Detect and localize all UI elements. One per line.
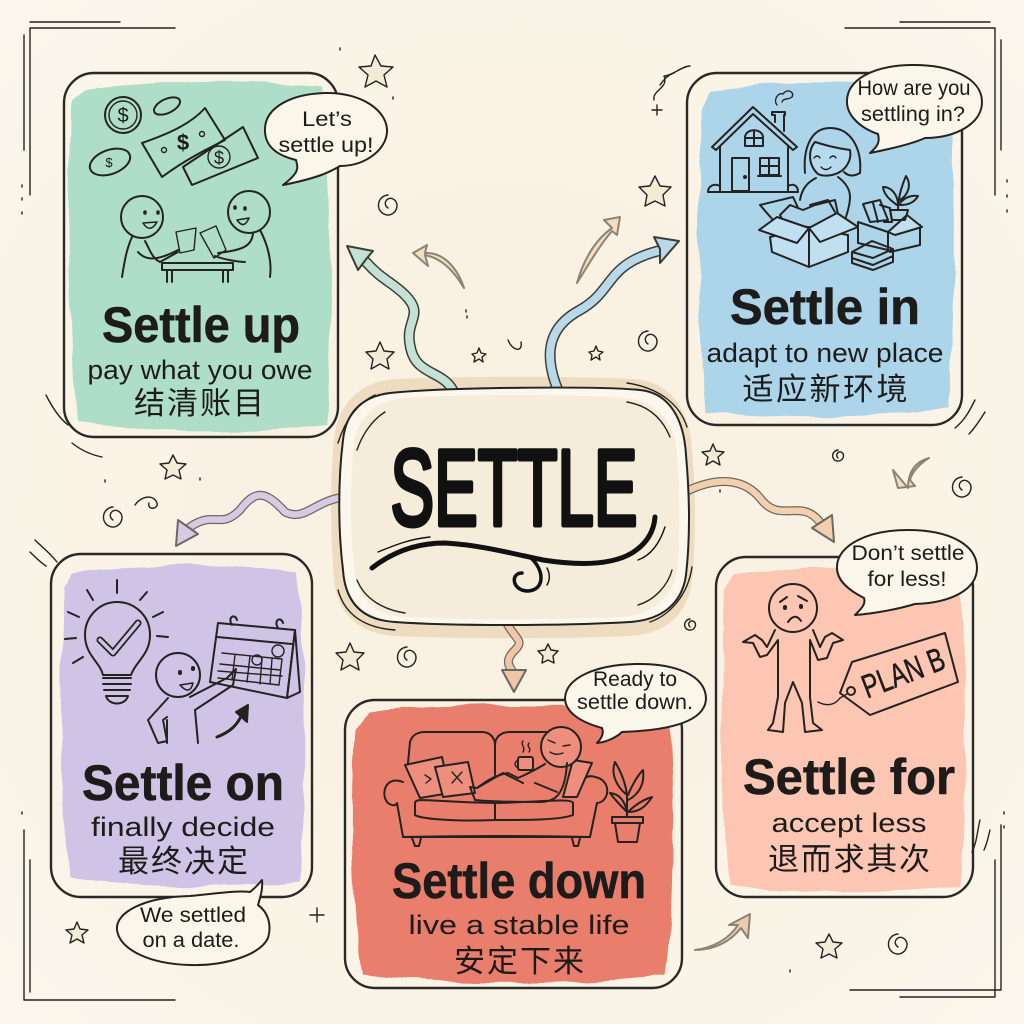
speech bubble: settle up! [278,134,374,157]
panel outline [716,557,973,897]
connector arrows [176,217,929,950]
icon: boxes [759,176,922,270]
title: SETTLE [390,427,638,548]
speech bubble [265,93,387,185]
arrow: to settle up [347,246,455,395]
chinese description: 适应新环境 [742,372,908,407]
description: pay what you owe [88,355,312,385]
description: adapt to new place [706,338,944,368]
panel: settle for [716,530,977,897]
panel outline [687,73,962,425]
panel outline [339,388,689,625]
speech bubble: Ready to [593,668,677,691]
panel outline [345,700,682,988]
icon: money: $ [177,130,189,155]
panel: center settle [338,383,692,630]
speech bubble: settling in? [861,103,965,126]
icon: money [86,94,258,185]
icon: money: $ [105,155,113,170]
arrow: to settle on [176,495,345,546]
arrow: to settle in [550,237,679,395]
icon: price tag [818,633,958,715]
icon: potted plant [610,762,652,842]
icon: house [708,91,798,192]
chinese description: 最终决定 [118,844,248,879]
icon: calendar [210,616,300,737]
panel outline [51,554,312,897]
panel background [61,565,305,887]
speech bubble: settle down. [577,691,693,714]
speech bubble: for less! [868,568,946,591]
icon: money: $ [117,105,129,127]
speech bubble [117,880,270,965]
arrow: to settle for [685,482,834,542]
panel background [352,704,673,983]
icon: sofa with person [384,727,607,846]
icon: person [800,128,860,217]
panel: settle in [687,65,982,425]
description: finally decide [91,812,275,842]
heading: Settle up [102,297,300,353]
arrow: to settle down [502,620,526,692]
panel outline [64,73,338,437]
heading: Settle on [82,755,284,811]
panel background [699,83,954,417]
description: live a stable life [408,910,630,940]
icon: price tag: PLAN B [856,640,950,705]
icon: two people at table [121,191,271,282]
speech bubble: Let’s [302,108,352,131]
panel: settle on [51,554,312,965]
panel background [723,567,966,892]
chinese description: 结清账目 [134,386,264,421]
heading: Settle in [730,279,920,335]
center panel tan band [331,377,695,638]
heading: Settle down [392,853,646,909]
speech bubble [847,65,982,153]
speech bubble [837,530,977,615]
panel: settle up [64,73,387,437]
inner wash [351,395,679,619]
speech bubble: on a date. [142,929,240,952]
underline flourish [372,517,665,591]
chinese description: 退而求其次 [768,842,930,877]
inner panel fill [339,388,689,625]
panel background [69,82,331,431]
icon: shrugging person [743,584,843,732]
speech bubble: Don’t settle [852,542,964,565]
heading: Settle for [743,749,955,805]
icon: money: $ [214,148,224,168]
panel: settle down [345,664,706,988]
icon: person pointing [148,653,236,743]
icon: lightbulb [65,580,168,704]
speech bubble [565,664,706,743]
chinese description: 安定下来 [454,944,584,979]
speech bubble: We settled [140,904,246,927]
description: accept less [772,808,926,838]
small accent arrows [413,217,929,950]
broken outer and inner strokes [338,383,692,630]
speech bubble: How are you [858,77,970,100]
